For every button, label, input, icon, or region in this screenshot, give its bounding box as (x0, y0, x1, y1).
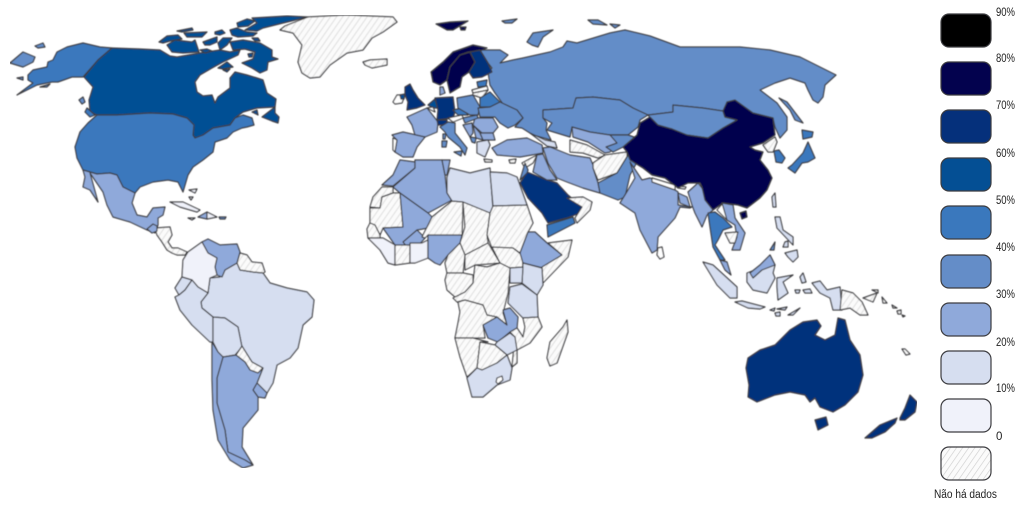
country: Lithuania (473, 90, 488, 98)
region: Russia and Central Asia (436, 19, 836, 180)
country: Russia (480, 30, 836, 140)
country: Portugal (393, 138, 397, 152)
country: France (407, 108, 438, 137)
country: Greenland (280, 15, 397, 78)
legend item: 10% (941, 383, 1015, 432)
country: Romania (473, 118, 498, 133)
country: Ireland (393, 95, 405, 104)
country: Mexico (83, 170, 165, 233)
country: Kenya (522, 263, 543, 295)
country: Czechia (453, 108, 468, 115)
country: Paraguay (236, 346, 263, 373)
legend (934, 7, 1015, 501)
country: Central African Republic (465, 243, 500, 270)
country: Uruguay (253, 383, 267, 398)
country: Spain (392, 132, 425, 157)
region: Middle East (520, 147, 637, 237)
country: Germany (435, 97, 455, 120)
Tasmania (815, 417, 828, 430)
legend item: 30% (941, 289, 1015, 336)
country: Norway (431, 45, 487, 85)
Caribbean islands (170, 189, 226, 220)
legend item: 40%: 40% (996, 242, 1015, 254)
country: Iceland (363, 59, 387, 68)
country: Papua New Guinea (840, 290, 868, 315)
country: Peru (175, 280, 213, 342)
Central America (147, 224, 187, 255)
Balkan countries (463, 123, 483, 143)
country: Japan (788, 130, 815, 173)
country: Tanzania (508, 284, 538, 318)
country: Kyrgyzstan (606, 135, 637, 152)
country: Sudan (487, 205, 533, 253)
country: Nigeria (428, 235, 462, 265)
country: Yemen (547, 217, 575, 237)
country: Syria (522, 155, 537, 168)
legend item: 80%: 80% (996, 53, 1015, 65)
country: Switzerland (437, 120, 447, 125)
country: Myanmar (688, 183, 713, 227)
legend item: 20% (941, 337, 1015, 384)
country: South Korea (774, 150, 785, 163)
legend item: 60% (941, 148, 1015, 191)
country: Israel and Jordan (520, 163, 528, 180)
country: Chile (212, 342, 253, 468)
world map (10, 15, 917, 468)
country: Latvia (472, 86, 488, 93)
country: Vietnam (722, 203, 745, 250)
country: Poland (457, 95, 480, 115)
country: Bangladesh (678, 193, 690, 207)
country: Italy (440, 122, 467, 155)
country: Cameroon (445, 243, 465, 273)
region: South America (175, 239, 314, 468)
country: Ethiopia (520, 232, 562, 268)
Indonesia and Philippines islands (703, 217, 842, 316)
country: Thailand (708, 212, 732, 260)
Canadian Arctic islands (159, 16, 308, 123)
country: Alaska (17, 43, 112, 95)
country: Estonia (477, 80, 487, 87)
country: Iraq (533, 154, 557, 180)
Pacific islands (863, 290, 910, 355)
country: Austria (448, 115, 463, 122)
country: Australia (746, 318, 863, 412)
country: Brazil (201, 263, 314, 393)
Novaya Zemlya (527, 30, 553, 47)
country: Botswana (477, 342, 507, 370)
Guianas (237, 253, 265, 273)
country: United States (75, 113, 254, 193)
Taiwan (772, 193, 776, 207)
legend item: 80% (941, 53, 1015, 95)
Mediterranean islands (442, 134, 516, 163)
country: Colombia (182, 242, 217, 293)
country: Libya (447, 168, 493, 213)
country: North Korea (763, 137, 777, 152)
legend item: 50% (941, 195, 1015, 239)
legend item: 60%: 60% (996, 148, 1015, 160)
legend item: no data (934, 447, 997, 501)
country: India (620, 162, 692, 253)
legend item: 70%: 70% (996, 100, 1015, 112)
legend item: 90% (941, 7, 1015, 47)
country: Namibia (455, 338, 488, 377)
country: Nepal (652, 178, 675, 190)
country: Saudi Arabia (520, 172, 582, 223)
country: Mongolia (648, 105, 737, 138)
Northern Ireland (400, 94, 405, 99)
country: Greece (477, 140, 490, 157)
country: Canada (84, 48, 276, 138)
Malay Peninsula (720, 260, 731, 275)
country: Angola (455, 300, 497, 338)
country: DR Congo (453, 263, 510, 325)
legend item: 30%: 30% (996, 289, 1015, 301)
legend item: 70% (941, 100, 1015, 143)
country: Niger (422, 201, 463, 238)
country: China (623, 100, 775, 210)
country: Somalia (542, 240, 572, 283)
Arctic islands (436, 19, 620, 30)
legend item: 40% (941, 242, 1015, 288)
country: Cambodia (725, 232, 738, 243)
country: South Africa (467, 355, 512, 397)
Pacific coast islands (10, 43, 95, 117)
country: Finland (469, 50, 492, 78)
region: Oceania (746, 318, 917, 438)
country: Venezuela (202, 239, 240, 277)
country: Zambia (483, 308, 518, 342)
legend item: 10%: 10% (996, 383, 1015, 395)
country: Sweden (447, 52, 475, 93)
country: Ecuador (175, 277, 192, 295)
country: Madagascar (547, 320, 568, 366)
country: South Sudan (492, 247, 523, 268)
country: Zimbabwe (495, 333, 517, 355)
region: Africa (367, 160, 572, 397)
legend item: 90%: 90% (996, 7, 1015, 19)
country: Belarus (480, 92, 500, 107)
legend item: 50%: 50% (996, 195, 1015, 207)
country: Oman (567, 197, 592, 223)
country: Turkmenistan (570, 140, 605, 158)
Hainan (740, 211, 747, 219)
country: Uganda (510, 267, 523, 283)
Caucasus (530, 133, 557, 148)
country: Lesotho (496, 376, 503, 384)
legend item: 20%: 20% (996, 337, 1015, 349)
country: Turkey (492, 138, 543, 157)
country: Egypt (490, 172, 527, 206)
legend item: 0: 0 (996, 431, 1002, 443)
Sakhalin (779, 98, 803, 123)
country: Argentina (217, 355, 263, 465)
country: Kazakhstan (543, 97, 648, 137)
country: Afghanistan (593, 152, 627, 180)
country: Iran (543, 147, 600, 193)
country: Sri Lanka (657, 247, 664, 259)
country: Laos (717, 203, 732, 220)
legend item: no data: Não há dados (934, 489, 997, 501)
country: Chad (460, 202, 490, 255)
country: Denmark (440, 87, 445, 95)
country: Hungary (463, 115, 478, 123)
country: Bhutan (677, 186, 686, 189)
region: South and East Asia (620, 100, 910, 355)
region: North America (10, 15, 397, 255)
country: Mozambique (510, 317, 542, 367)
country: Bolivia (213, 317, 242, 357)
country: Netherlands (428, 99, 438, 108)
country: Congo and Gabon (445, 273, 473, 297)
country: Bulgaria (480, 133, 495, 140)
region: Europe (363, 45, 557, 163)
country: United Kingdom (405, 84, 425, 110)
country: Uzbekistan (572, 127, 628, 153)
country: Ukraine (478, 102, 523, 128)
country: Pakistan (598, 155, 637, 200)
country: Belgium (427, 107, 435, 112)
country: New Zealand (865, 395, 917, 438)
